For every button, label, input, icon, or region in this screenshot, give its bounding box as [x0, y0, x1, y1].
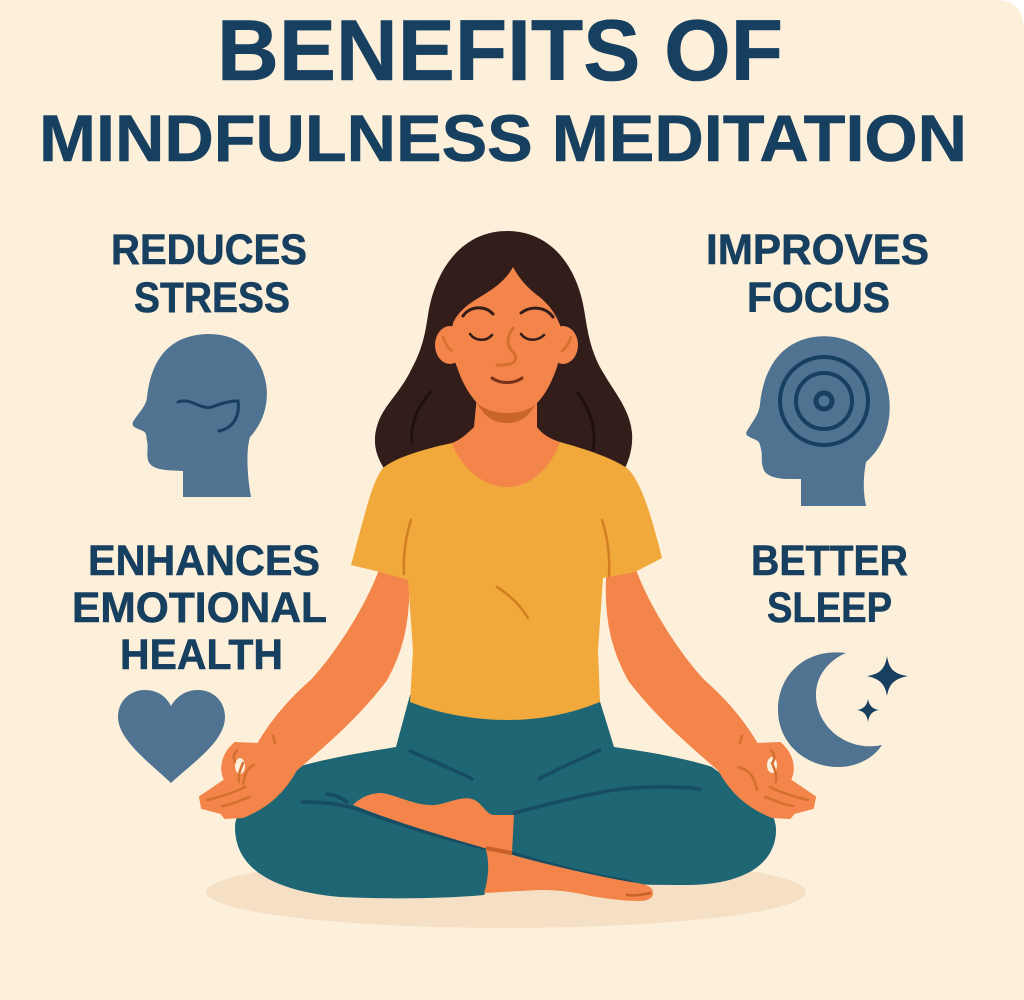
label: enhances emotional health — [72, 537, 327, 679]
left arm and hand — [200, 570, 408, 818]
foot: upper — [353, 793, 514, 853]
label: improves focus — [706, 226, 929, 322]
pants — [235, 695, 776, 898]
icon: head with brain line — [133, 334, 267, 497]
icon: head with target — [746, 336, 890, 506]
label: better sleep — [751, 537, 908, 632]
label: improves focus: IMPROVES — [706, 226, 929, 274]
icon: moon and stars — [778, 652, 908, 767]
neck — [452, 395, 560, 487]
label: reduces stress: STRESS — [134, 274, 290, 322]
ground shadow — [206, 856, 806, 928]
hair — [375, 231, 632, 470]
label: reduces stress — [111, 226, 307, 322]
label: improves focus: FOCUS — [747, 274, 890, 322]
title: MINDFULNESS MEDITATION — [39, 101, 967, 175]
face — [452, 267, 562, 413]
title: BENEFITS OF — [217, 3, 783, 99]
label: enhances emotional health: EMOTIONAL — [72, 584, 327, 632]
label: enhances emotional health: ENHANCES — [88, 537, 320, 585]
title — [39, 3, 967, 175]
figure: meditating woman — [200, 231, 815, 901]
foot: lower — [484, 848, 653, 901]
label: better sleep: BETTER — [751, 537, 908, 585]
label: better sleep: SLEEP — [767, 584, 892, 632]
label: reduces stress: REDUCES — [111, 226, 307, 274]
ears — [435, 326, 578, 364]
icon: heart — [118, 690, 225, 783]
shirt — [351, 442, 662, 720]
right arm and hand — [607, 570, 815, 818]
label: enhances emotional health: HEALTH — [120, 631, 283, 679]
